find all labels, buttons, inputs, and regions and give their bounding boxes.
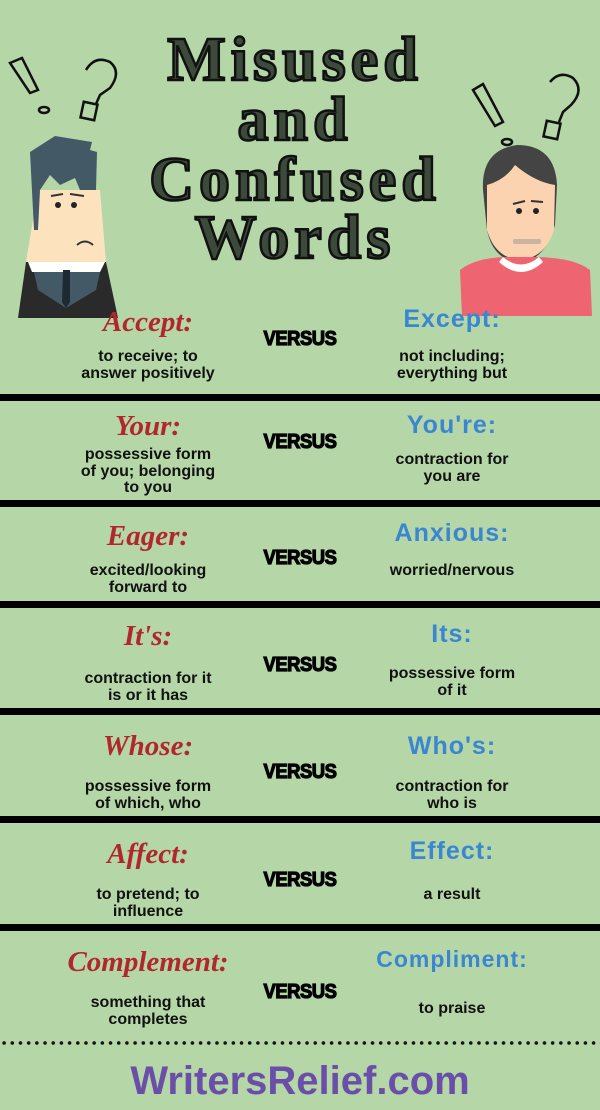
definition: anxious: worried/nervous (390, 562, 514, 579)
word: Your: Your: (115, 410, 181, 442)
versus label: VERSUS (264, 981, 336, 1003)
definition: whose: of which, who (95, 794, 201, 812)
versus label: VERSUS (264, 761, 336, 783)
definition: your: possessive form (85, 446, 211, 463)
row 6: affect vs effect (96, 837, 494, 920)
definition: accept (81, 348, 215, 382)
definition: except: everything but (397, 364, 507, 382)
definition: affect: influence (113, 902, 183, 920)
word: Eager: Eager: (107, 520, 189, 552)
definition: eager: excited/looking (90, 562, 206, 579)
versus label: VERSUS (264, 547, 336, 569)
definition: effect: a result (424, 886, 480, 903)
definition: its: possessive form (389, 665, 515, 682)
word: Anxious: Anxious: (395, 519, 509, 547)
definition: you're: contraction for (396, 451, 508, 468)
title: Words (195, 204, 395, 270)
definition: its: of it (437, 682, 467, 698)
definition: except: not including; (399, 348, 505, 365)
icon: confused businessman (8, 56, 118, 318)
definition: affect (96, 886, 200, 920)
row 4: it's vs its (84, 620, 515, 704)
definition: complement: something that (91, 994, 205, 1011)
title: Confused (149, 146, 441, 214)
definition: whose: possessive form (85, 778, 211, 795)
definition: it's: is or it has (108, 686, 188, 704)
versus label: VERSUS (264, 431, 336, 453)
row 3: eager vs anxious (90, 519, 514, 596)
versus label: VERSUS (264, 869, 336, 891)
definition: whose (85, 778, 211, 812)
word: Except: Except: (403, 305, 501, 333)
versus label: VERSUS (264, 654, 336, 676)
word: Affect: Affect: (107, 838, 189, 870)
definition: who's: contraction for (396, 778, 508, 795)
title: and (238, 86, 352, 154)
definition: affect: to pretend; to (96, 886, 200, 903)
definition: who's: who is (427, 794, 477, 812)
definition: accept: to receive; to (98, 348, 198, 365)
definition: your (81, 446, 215, 496)
versus label: VERSUS (264, 328, 336, 350)
word: It's: It's: (124, 620, 172, 652)
definition: who's (396, 778, 508, 812)
definition: it's (84, 670, 212, 704)
word: Accept: Accept: (103, 306, 193, 338)
word: Effect: Effect: (410, 837, 494, 865)
definition: its (389, 665, 515, 698)
title: Misused (167, 26, 423, 94)
definition: your: of you; belonging (81, 462, 215, 480)
word: Who's: Who's: (408, 732, 496, 760)
row 1: accept vs except (81, 305, 507, 382)
title (149, 26, 441, 270)
definition: you're (396, 451, 508, 484)
definition: complement: completes (108, 1010, 188, 1028)
definition: you're: you are (424, 468, 480, 484)
word: Whose: Whose: (103, 730, 193, 762)
row 7: complement vs compliment (67, 946, 528, 1028)
definition: your: to you (124, 479, 172, 496)
definition: accept: answer positively (81, 364, 215, 382)
definition: complement (91, 994, 206, 1028)
definition: except (397, 348, 507, 382)
word: Compliment: Compliment: (376, 946, 528, 972)
definition: eager (90, 562, 206, 596)
row 5: whose vs who's (85, 730, 508, 812)
row 2: your vs you're (81, 410, 508, 496)
definition: eager: forward to (109, 578, 187, 596)
word: You're: You're: (407, 411, 497, 439)
definition: it's: contraction for it (84, 670, 212, 687)
word: Its: Its: (431, 620, 473, 648)
word: Complement: Complement: (67, 946, 229, 978)
icon: confused young man (460, 74, 592, 316)
definition: compliment: to praise (419, 1000, 485, 1017)
footer: website: WritersRelief.com (130, 1059, 470, 1103)
